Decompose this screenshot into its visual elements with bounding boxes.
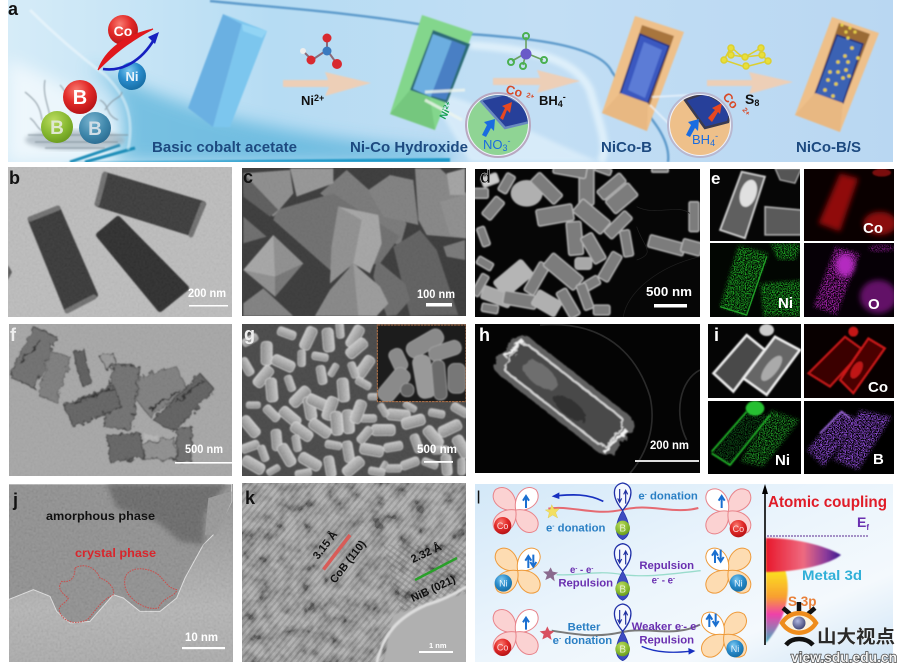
label: Co2+ S8 bbox=[724, 93, 760, 115]
label i: i bbox=[714, 325, 719, 345]
row 1 boron orbital bbox=[614, 483, 631, 540]
panel l: atomic coupling schematic bbox=[475, 483, 897, 665]
text: e- donation top left: e bbox=[546, 522, 552, 534]
icon: NiCo-B/S prism with sulfur bbox=[795, 17, 879, 132]
icon: BH4- bubble: - bbox=[715, 131, 718, 141]
label: Co2+ S8: 8 bbox=[754, 98, 759, 108]
row 1 right Co orbital bbox=[701, 484, 755, 538]
label: Co2+ BH4- bbox=[506, 86, 566, 107]
watermark: site name: 山大视点 bbox=[817, 627, 895, 647]
label: CoB (110): CoB (110) bbox=[328, 538, 369, 586]
label Co: Co bbox=[868, 379, 888, 396]
row 3 left Co orbital bbox=[489, 605, 543, 659]
scale bar: 10 nm bbox=[182, 630, 225, 649]
text: e- donation top left: - bbox=[552, 523, 555, 530]
star: mauve bbox=[543, 567, 558, 581]
star: red bbox=[540, 626, 554, 640]
label k: k bbox=[245, 488, 256, 508]
panel k: lattice fringes bbox=[242, 483, 467, 663]
label: NiB (021): NiB (021) bbox=[409, 574, 458, 605]
row 2 right Ni orbital: Ni bbox=[734, 578, 743, 588]
scale bar: 200 nm: 200 nm bbox=[650, 440, 689, 452]
map: HAADF bbox=[708, 324, 801, 398]
scale bar: 500 nm: 500 nm bbox=[185, 444, 223, 456]
row 2 boron orbital bbox=[614, 544, 631, 600]
panel c: SEM of prisms bbox=[242, 167, 467, 316]
label: S 3p: S 3p bbox=[788, 594, 817, 609]
icon: NO3- bubble: 3 bbox=[502, 143, 508, 153]
label b: b bbox=[9, 168, 20, 188]
row 1 left Co orbital bbox=[489, 483, 543, 537]
text: e- - e- row 2 right: - bbox=[657, 577, 659, 583]
arrow: Ni2+ step bbox=[283, 72, 371, 96]
icon: splash with B atoms: B bbox=[73, 87, 87, 109]
caption: NiCo-B: NiCo-B bbox=[601, 139, 652, 156]
panel f: TEM of hollow rods bbox=[9, 324, 232, 476]
row 2 boron orbital: B bbox=[619, 584, 626, 595]
arrow: row 3 repulsion bbox=[642, 646, 695, 655]
row 2 left Ni orbital: Ni bbox=[499, 578, 508, 588]
panel a: synthesis schematic bbox=[8, 0, 893, 162]
label: Co2+ S8: S bbox=[745, 91, 754, 107]
row 2 right Ni orbital bbox=[701, 544, 755, 598]
text: e- - e- row 2 right: - e bbox=[659, 575, 674, 586]
text: Weaker e- - e-: Weaker e bbox=[632, 621, 681, 633]
text: e- donation row 3: donation bbox=[561, 635, 612, 647]
watermark: URL: view.sdu.edu.cn bbox=[791, 649, 897, 665]
map: Ni bbox=[708, 401, 801, 474]
icon: Ni-Co hydroxide hollow prism bbox=[390, 15, 473, 130]
text: e- - e- row 2 right: e bbox=[652, 575, 657, 586]
label: Ef: f bbox=[866, 523, 869, 532]
text: e- donation top right: donation bbox=[647, 491, 698, 503]
scale bar: 200 nm: 200 nm bbox=[188, 288, 226, 300]
row 1 left Co orbital: Co bbox=[497, 521, 508, 531]
label: Ni2+: 2+ bbox=[314, 93, 324, 103]
text: e- - e- row 2 left: - bbox=[575, 566, 577, 572]
icon: BH4- bubble: 4 bbox=[710, 138, 715, 148]
label: Co2+ S8: Co bbox=[720, 90, 741, 112]
scale bar: 500 nm bbox=[417, 444, 457, 463]
map: HAADF bbox=[710, 168, 802, 241]
star: yellow bbox=[545, 505, 559, 518]
label: Co2+ BH4-: - bbox=[563, 92, 566, 102]
text: Repulsion row 3: Repulsion bbox=[639, 635, 694, 647]
label: Co2+ BH4-: 2+ bbox=[525, 92, 535, 101]
icon: BH4- bubble bbox=[667, 92, 733, 158]
chart: S 3p band bbox=[766, 540, 788, 643]
label: Ni2+: Ni bbox=[301, 93, 314, 108]
wave: row 1 bbox=[548, 508, 698, 512]
icon: splash with B atoms: B bbox=[50, 118, 64, 139]
row 3 boron orbital bbox=[614, 604, 631, 661]
label Co: Co bbox=[863, 220, 883, 237]
row 3 boron orbital: B bbox=[619, 645, 626, 656]
text: Better: Better bbox=[568, 621, 601, 633]
wave: row 3 bbox=[552, 625, 700, 635]
arrow: BH4- step bbox=[493, 70, 580, 93]
scale bar: 500 nm bbox=[646, 285, 692, 308]
label d: d bbox=[480, 167, 491, 187]
scale bar: 100 nm bbox=[417, 289, 455, 306]
icon: splash with B atoms bbox=[25, 80, 128, 150]
label l: l bbox=[477, 487, 481, 507]
panel e: elemental mapping of hydroxide bbox=[710, 168, 897, 317]
icon: NO3- bubble: - bbox=[508, 136, 511, 146]
text: e- - e- row 2 left: - bbox=[591, 566, 593, 572]
map: Ni bbox=[710, 243, 802, 317]
label: Co2+ BH4-: BH bbox=[539, 93, 558, 108]
label: 2.32 A: 2.32 Å bbox=[409, 540, 444, 566]
chart: energy axis bbox=[762, 484, 768, 645]
icon: NO3- bubble bbox=[465, 92, 531, 158]
icon: BH4 molecule bbox=[508, 33, 547, 69]
icon: NO3- bubble: NO bbox=[483, 137, 502, 152]
map: Co bbox=[804, 169, 897, 241]
label: 3.15 A: 3.15 Å bbox=[310, 528, 340, 562]
label: Co2+ S8: 2+ bbox=[740, 107, 751, 117]
map: Co bbox=[804, 324, 894, 398]
row 3 right Ni orbital: Ni bbox=[731, 644, 739, 654]
scale bar: 200 nm bbox=[635, 440, 699, 462]
marker: CoB lattice line bbox=[324, 535, 350, 570]
row 3 right Ni orbital bbox=[697, 608, 751, 662]
label: Ni2+ along hydroxide: 2+ bbox=[443, 100, 453, 111]
icon: BH4- bubble: BH bbox=[692, 132, 710, 147]
icon: Co and Ni exchange arrows: Co bbox=[114, 23, 132, 39]
text: e- donation row 3: e bbox=[553, 635, 559, 647]
icon: nitrate molecule bbox=[300, 34, 342, 69]
text: Weaker e- - e-: - e bbox=[683, 621, 696, 633]
icon: Co and Ni exchange arrows bbox=[98, 15, 159, 90]
map: O bbox=[804, 243, 897, 317]
label: Co2+ BH4-: 4 bbox=[558, 99, 563, 109]
panel g: SEM of hollow rods with inset bbox=[238, 321, 473, 479]
icon: S8 molecule bbox=[721, 45, 771, 69]
scale bar: 500 nm bbox=[175, 444, 232, 464]
chart: Metal 3d band bbox=[766, 538, 841, 572]
scale bar: 500 nm: 500 nm bbox=[417, 444, 457, 456]
text: e- donation top right: - bbox=[645, 491, 647, 498]
inset: magnified rods bbox=[375, 325, 466, 406]
label O: O bbox=[868, 296, 880, 313]
caption: Ni-Co Hydroxide: Ni-Co Hydroxide bbox=[350, 139, 468, 156]
panel d: dark-field overview bbox=[471, 162, 703, 319]
label: crystal phase: crystal phase bbox=[75, 546, 156, 560]
row 1 right Co orbital: Co bbox=[733, 524, 744, 534]
text: Repulsion row 2 left: Repulsion bbox=[558, 578, 613, 590]
scale bar: 10 nm: 10 nm bbox=[185, 630, 218, 644]
text: Repulsion row 2 right: Repulsion bbox=[639, 560, 694, 572]
label g: g bbox=[244, 324, 255, 344]
wave: row 2 bbox=[557, 571, 701, 576]
icon: Co and Ni exchange arrows: Ni bbox=[126, 69, 138, 84]
panel b: TEM of solid rods bbox=[8, 167, 232, 317]
label e: e bbox=[711, 169, 720, 188]
label: Ni2+ along hydroxide: Ni bbox=[438, 107, 452, 121]
map: B bbox=[804, 401, 894, 474]
text: e- - e- row 2 left: e bbox=[570, 565, 575, 576]
text: Weaker e- - e-: - bbox=[681, 623, 683, 629]
label: Co2+ BH4-: Co bbox=[504, 82, 524, 100]
icon: basic cobalt acetate prism bbox=[188, 14, 267, 127]
panel j: HRTEM phases bbox=[8, 484, 233, 662]
label Ni: Ni bbox=[775, 452, 790, 469]
label: Metal 3d: Metal 3d bbox=[802, 568, 862, 583]
arrow: row 1 donation bbox=[552, 492, 603, 501]
text: e- donation top left: donation bbox=[555, 522, 606, 534]
label: Ef: E bbox=[857, 514, 866, 530]
label h: h bbox=[479, 325, 490, 345]
text: e- - e- row 2 left: - e bbox=[577, 565, 592, 576]
row 1 boron orbital: B bbox=[619, 524, 626, 535]
label Ni: Ni bbox=[778, 295, 793, 312]
chart: Fermi level dashed line bbox=[767, 535, 868, 537]
text: e- - e- row 2 right: - bbox=[673, 577, 675, 583]
scale bar: 100 nm: 100 nm bbox=[417, 289, 455, 301]
scale bar: 1 nm: 1 nm bbox=[429, 641, 447, 650]
panel i: elemental mapping of NiCo-B bbox=[708, 324, 894, 474]
row 3 left Co orbital: Co bbox=[497, 643, 508, 653]
scale bar: 500 nm: 500 nm bbox=[646, 285, 692, 299]
panel h: single rod dark-field bbox=[475, 324, 700, 473]
label: amorphous phase: amorphous phase bbox=[46, 509, 155, 523]
text: e- donation top right: e bbox=[638, 491, 645, 503]
caption: Basic cobalt acetate: Basic cobalt acetate bbox=[152, 139, 297, 156]
text: Weaker e- - e-: - bbox=[696, 623, 698, 629]
marker: NiB lattice line bbox=[415, 558, 457, 580]
arrow: S8 step bbox=[707, 72, 793, 94]
caption: NiCo-B/S: NiCo-B/S bbox=[796, 139, 861, 156]
watermark logo bbox=[782, 602, 897, 665]
label B: B bbox=[873, 451, 884, 468]
text: e- donation row 3: - bbox=[559, 636, 561, 643]
scale bar: 200 nm bbox=[188, 288, 228, 306]
label j: j bbox=[12, 490, 18, 510]
label f: f bbox=[10, 325, 17, 345]
row 2 left Ni orbital bbox=[491, 544, 545, 598]
label: Atomic coupling: Atomic coupling bbox=[768, 494, 887, 511]
icon: NiCo-B hollow prism bbox=[602, 16, 690, 131]
label c: c bbox=[243, 167, 253, 187]
icon: splash with B atoms: B bbox=[88, 119, 102, 140]
scale bar: 1 nm bbox=[419, 641, 453, 653]
